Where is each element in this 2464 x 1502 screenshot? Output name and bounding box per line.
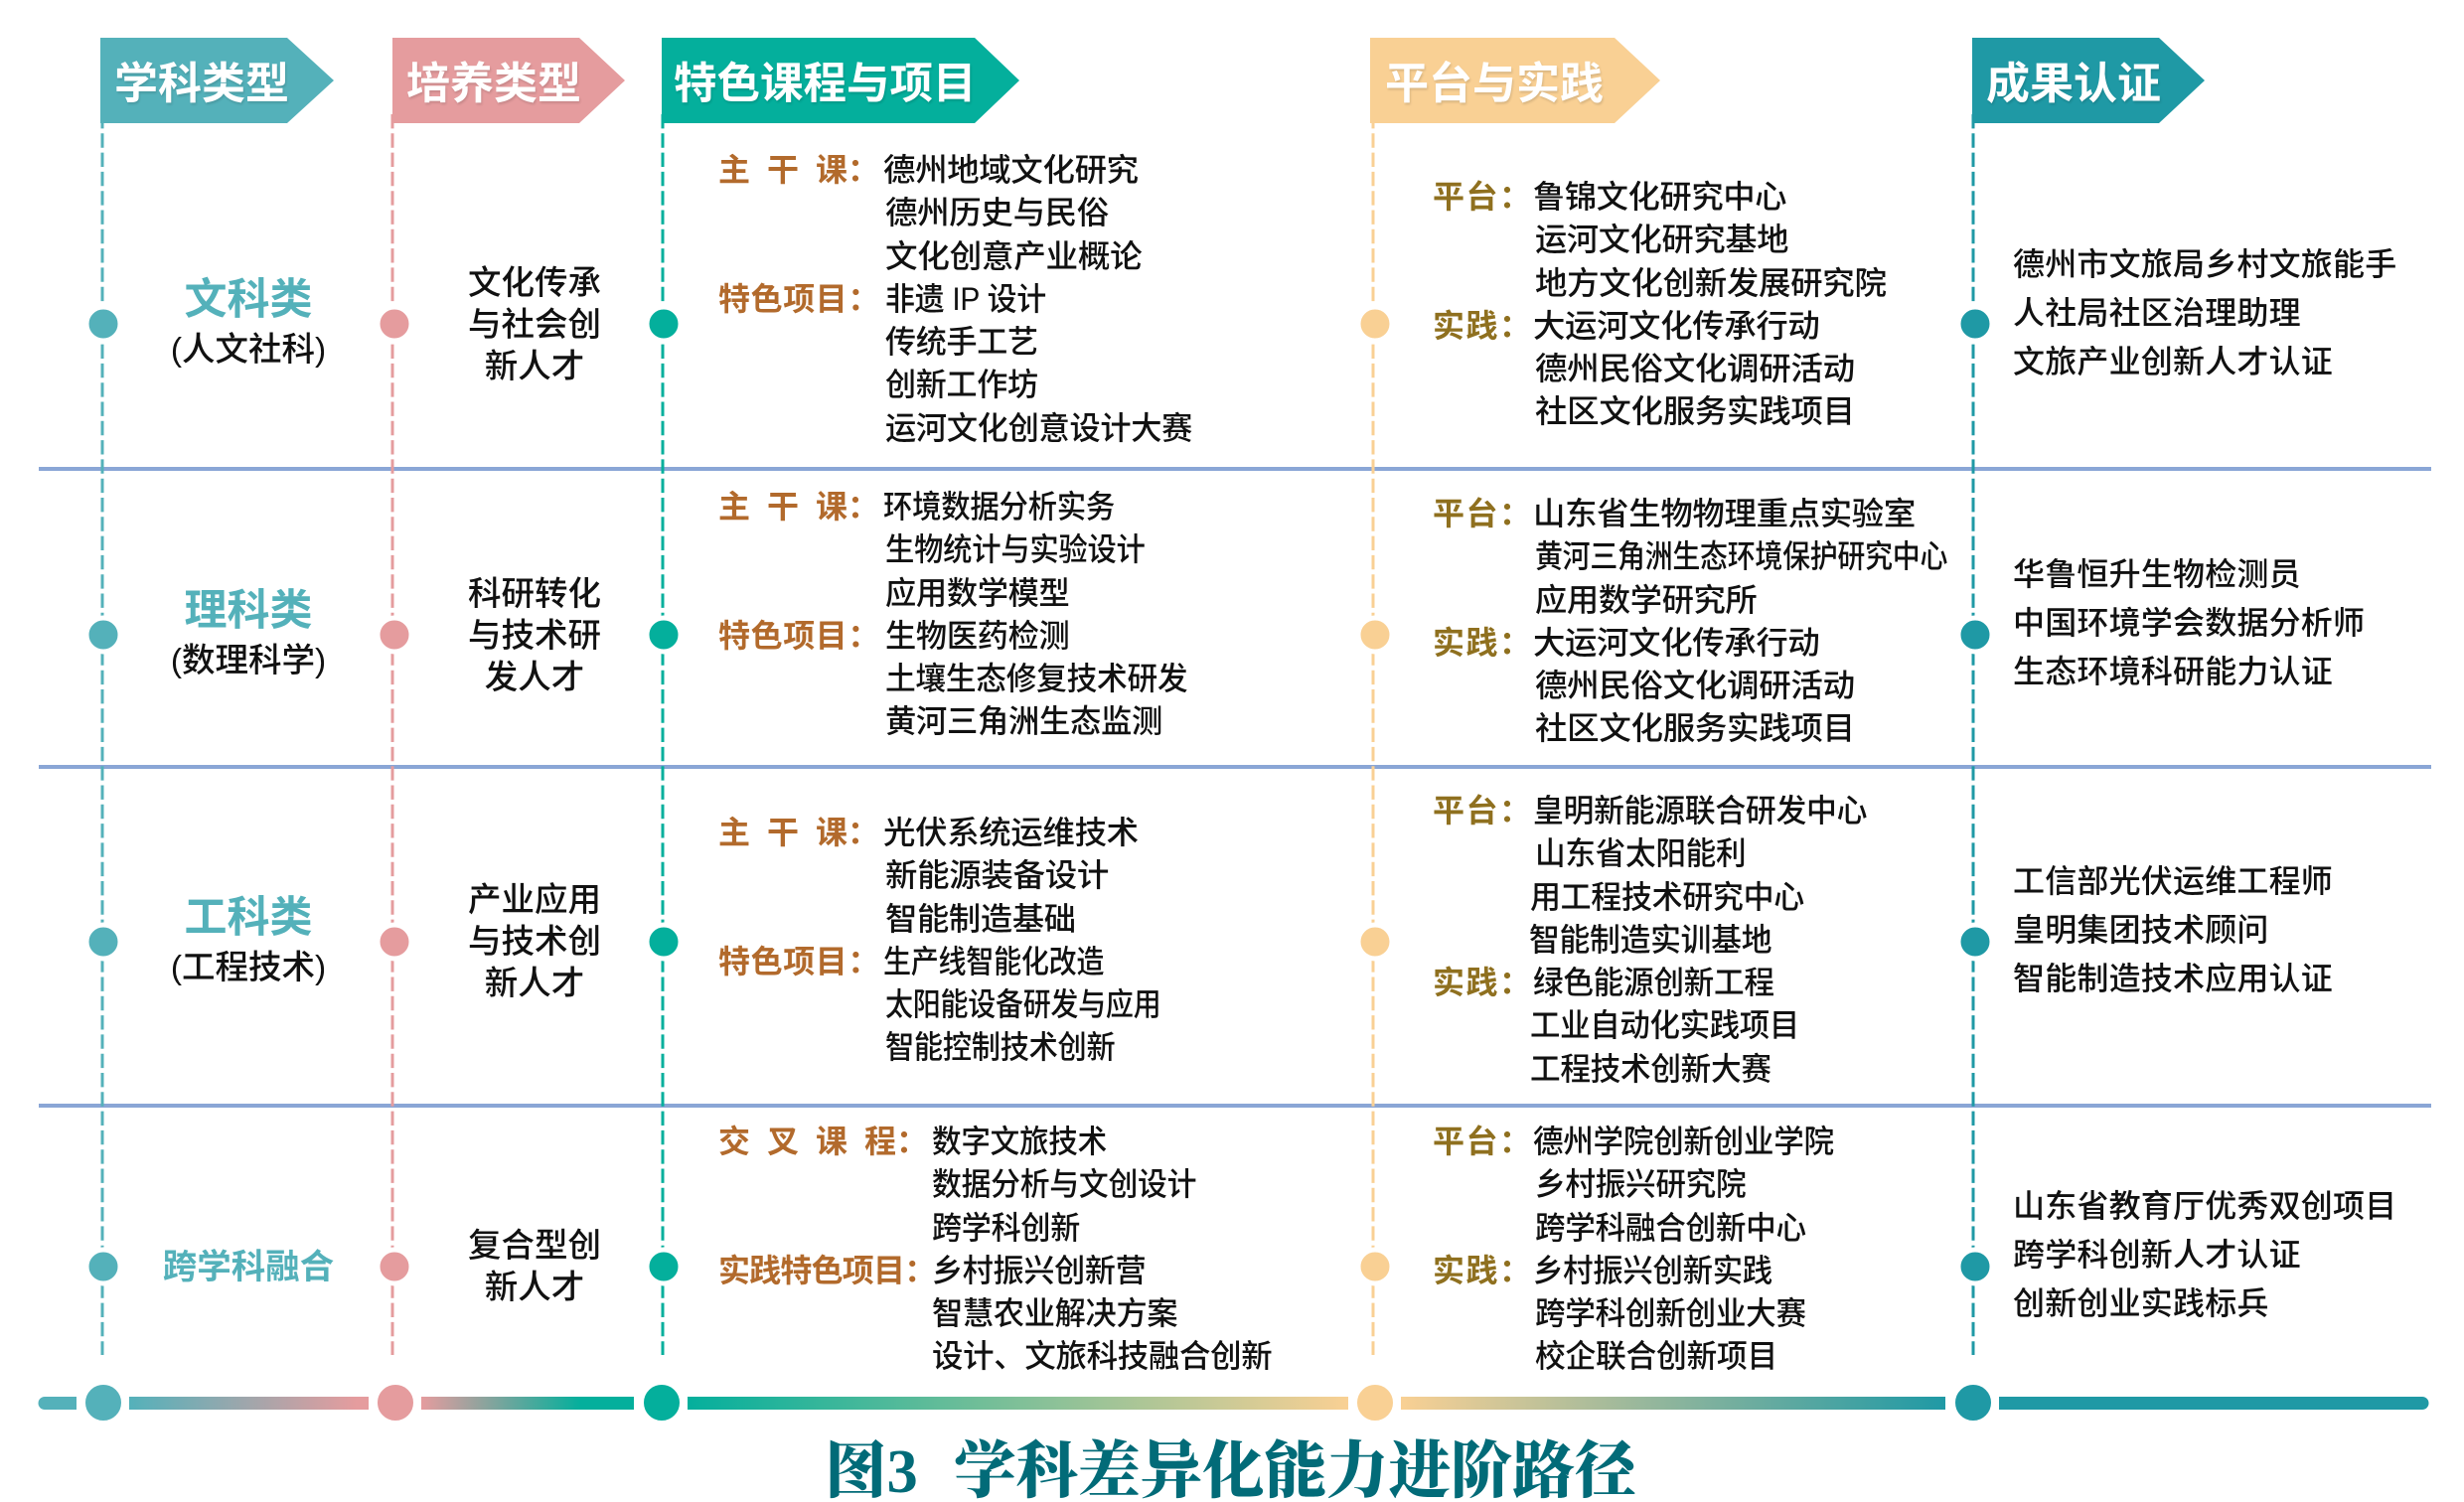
platforms: 文科类: 大运河文化传承行动	[1533, 308, 1819, 344]
training type: 产业应用与技术创新人才: 新人才	[485, 966, 584, 1002]
courses: 文科类	[718, 152, 1192, 446]
courses: 理科类: 黄河三角洲生态监测	[885, 703, 1162, 739]
courses: 工科类: 智能制造基础	[885, 901, 1076, 937]
platforms: 理科类: 黄河三角洲生态环境保护研究中心	[1535, 538, 1947, 574]
outcomes: 理科类: 生态环境科研能力认证	[2013, 654, 2333, 689]
courses: 文科类: 创新工作坊	[885, 367, 1038, 402]
courses: 理科类: 生物统计与实验设计	[885, 531, 1146, 567]
discipline: 工科类: 工科类	[185, 894, 312, 942]
courses: 文科类: 传统手工艺	[885, 324, 1038, 360]
platforms: 工科类: 山东省太阳能利	[1535, 835, 1746, 871]
outcomes: 理科类: 华鲁恒升生物检测员	[2013, 556, 2301, 592]
courses: 理科类: 应用数学模型	[885, 575, 1069, 611]
platforms: 工科类: 用工程技术研究中心	[1530, 879, 1804, 915]
courses: 理科类	[718, 489, 1187, 739]
courses: 跨学科融合: 跨学科创新	[932, 1210, 1080, 1246]
platforms: 理科类: 山东省生物物理重点实验室	[1533, 496, 1916, 531]
platforms: 理科类: 实践：	[1433, 625, 1533, 661]
platforms: 工科类: 皇明新能源联合研发中心	[1533, 793, 1867, 828]
discipline: 理科类: (数理科学)	[171, 643, 326, 679]
platforms: 文科类: 平台：	[1433, 179, 1533, 215]
training type: 产业应用与技术创新人才: 产业应用	[468, 882, 601, 919]
header arrow: 培养类型	[392, 38, 625, 123]
courses: 理科类: 土壤生态修复技术研发	[885, 661, 1187, 696]
header arrow: 学科类型	[100, 38, 334, 123]
outcomes: 工科类: 皇明集团技术顾问	[2013, 912, 2269, 948]
courses: 跨学科融合: 设计、文旅科技融合创新	[932, 1338, 1272, 1374]
training type: 复合型创新人才: 复合型创	[468, 1228, 601, 1265]
platforms: 工科类: 智能制造实训基地	[1529, 922, 1771, 958]
platforms: 跨学科融合: 平台：	[1433, 1124, 1533, 1159]
heading: 特色课程与项目: 特色课程与项目	[674, 61, 976, 108]
courses: 跨学科融合: 乡村振兴创新营	[932, 1253, 1146, 1288]
courses: 工科类: 主干课：	[718, 815, 879, 850]
training type: 科研转化与技术研发人才	[468, 576, 601, 696]
platforms: 文科类: 实践：	[1433, 308, 1533, 344]
outcomes: 跨学科融合	[2013, 1188, 2396, 1321]
platforms: 跨学科融合: 实践：	[1433, 1253, 1533, 1288]
platforms: 工科类: 平台：	[1433, 793, 1533, 828]
outcomes: 跨学科融合: 山东省教育厅优秀双创项目	[2013, 1188, 2396, 1224]
platforms: 文科类	[1433, 179, 1887, 429]
platforms: 跨学科融合: 校企联合创新项目	[1535, 1338, 1777, 1374]
courses: 跨学科融合: 实践特色项目：	[718, 1253, 935, 1288]
courses: 跨学科融合: 数字文旅技术	[932, 1124, 1107, 1159]
platforms: 工科类: 绿色能源创新工程	[1533, 965, 1774, 1000]
training type: 文化传承与社会创新人才: 文化传承	[468, 265, 601, 302]
training type: 复合型创新人才	[468, 1228, 601, 1306]
training type: 文化传承与社会创新人才: 与社会创	[468, 307, 601, 344]
courses: 文科类: 文化创意产业概论	[885, 238, 1142, 274]
platforms: 跨学科融合	[1433, 1124, 1834, 1374]
platforms: 文科类: 德州民俗文化调研活动	[1535, 351, 1855, 386]
platforms: 理科类	[1433, 496, 1947, 746]
training type: 复合型创新人才: 新人才	[485, 1270, 584, 1306]
courses: 跨学科融合: 交叉课程：	[718, 1124, 928, 1159]
platforms: 理科类: 德州民俗文化调研活动	[1535, 668, 1855, 703]
outcomes: 工科类: 工信部光伏运维工程师	[2013, 863, 2333, 899]
outcomes: 理科类	[2013, 556, 2365, 689]
courses: 文科类: 特色项目：	[718, 281, 880, 317]
courses: 工科类: 生产线智能化改造	[883, 944, 1104, 979]
outcomes: 跨学科融合: 跨学科创新人才认证	[2013, 1237, 2301, 1273]
discipline: 文科类: (人文社科)	[171, 332, 326, 369]
heading: 成果认证: 成果认证	[1986, 60, 2161, 108]
courses: 文科类: 运河文化创意设计大赛	[885, 410, 1192, 446]
courses: 工科类: 光伏系统运维技术	[883, 815, 1139, 850]
courses: 工科类: 太阳能设备研发与应用	[885, 986, 1160, 1022]
platforms: 跨学科融合: 跨学科融合创新中心	[1535, 1210, 1806, 1246]
platforms: 文科类: 地方文化创新发展研究院	[1535, 265, 1887, 301]
training type: 文化传承与社会创新人才: 新人才	[485, 349, 584, 385]
header arrow: 特色课程与项目	[662, 38, 1019, 123]
discipline: 文科类	[171, 276, 326, 369]
platforms: 跨学科融合: 德州学院创新创业学院	[1533, 1124, 1834, 1159]
training type: 科研转化与技术研发人才: 科研转化	[468, 576, 601, 613]
platforms: 工科类: 实践：	[1433, 965, 1533, 1000]
platforms: 理科类: 社区文化服务实践项目	[1535, 710, 1855, 746]
training type: 产业应用与技术创新人才: 与技术创	[468, 924, 601, 961]
courses: 文科类: 主干课：	[718, 152, 879, 188]
platforms: 跨学科融合: 乡村振兴研究院	[1535, 1166, 1746, 1202]
training type: 文化传承与社会创新人才	[468, 265, 601, 385]
discipline: 理科类: 理科类	[185, 587, 312, 635]
heading: 培养类型: 培养类型	[406, 60, 581, 108]
training type: 产业应用与技术创新人才	[468, 882, 601, 1002]
courses: 跨学科融合: 数据分析与文创设计	[932, 1166, 1196, 1202]
courses: 跨学科融合	[718, 1124, 1272, 1374]
platforms: 理科类: 应用数学研究所	[1535, 582, 1757, 618]
discipline: 跨学科融合: 跨学科融合	[163, 1249, 334, 1286]
platforms: 跨学科融合: 乡村振兴创新实践	[1533, 1253, 1772, 1288]
courses: 理科类: 生物医药检测	[885, 618, 1069, 654]
platforms: 工科类: 工程技术创新大赛	[1530, 1051, 1771, 1087]
courses: 工科类: 新能源装备设计	[885, 857, 1109, 893]
courses: 文科类: 非遗 IP 设计	[885, 281, 1046, 317]
discipline: 文科类: 文科类	[185, 276, 312, 324]
platforms: 工科类	[1433, 793, 1867, 1087]
platforms: 文科类: 运河文化研究基地	[1535, 222, 1788, 257]
training type: 科研转化与技术研发人才: 与技术研	[468, 618, 601, 655]
heading: 平台与实践: 平台与实践	[1385, 60, 1604, 108]
outcomes: 工科类	[2013, 863, 2333, 996]
courses: 理科类: 环境数据分析实务	[883, 489, 1115, 525]
outcomes: 文科类: 人社局社区治理助理	[2013, 295, 2301, 331]
courses: 文科类: 德州地域文化研究	[883, 152, 1139, 188]
outcomes: 跨学科融合: 创新创业实践标兵	[2013, 1285, 2269, 1321]
courses: 跨学科融合: 智慧农业解决方案	[932, 1295, 1177, 1331]
heading: 学科类型: 学科类型	[114, 60, 289, 108]
header arrow: 成果认证	[1972, 38, 2205, 123]
courses: 工科类	[718, 815, 1160, 1065]
outcomes: 理科类: 中国环境学会数据分析师	[2013, 605, 2365, 641]
discipline: 工科类: (工程技术)	[171, 950, 326, 986]
outcomes: 文科类: 德州市文旅局乡村文旅能手	[2013, 246, 2396, 282]
courses: 文科类: 德州历史与民俗	[885, 195, 1109, 230]
discipline: 理科类	[171, 587, 326, 679]
platforms: 跨学科融合: 跨学科创新创业大赛	[1535, 1295, 1806, 1331]
platforms: 工科类: 工业自动化实践项目	[1530, 1007, 1799, 1043]
platforms: 文科类: 鲁锦文化研究中心	[1533, 179, 1786, 215]
platforms: 理科类: 大运河文化传承行动	[1533, 625, 1819, 661]
outcomes: 工科类: 智能制造技术应用认证	[2013, 961, 2333, 996]
courses: 理科类: 主干课：	[718, 489, 879, 525]
courses: 工科类: 智能控制技术创新	[885, 1029, 1115, 1065]
outcomes: 文科类: 文旅产业创新人才认证	[2013, 344, 2333, 379]
header arrow: 平台与实践	[1370, 38, 1660, 123]
platforms: 文科类: 社区文化服务实践项目	[1535, 393, 1855, 429]
discipline: 工科类	[171, 894, 326, 986]
outcomes: 文科类	[2013, 246, 2396, 379]
courses: 理科类: 特色项目：	[718, 618, 880, 654]
platforms: 理科类: 平台：	[1433, 496, 1533, 531]
courses: 工科类: 特色项目：	[718, 944, 880, 979]
training type: 科研转化与技术研发人才: 发人才	[485, 660, 584, 696]
